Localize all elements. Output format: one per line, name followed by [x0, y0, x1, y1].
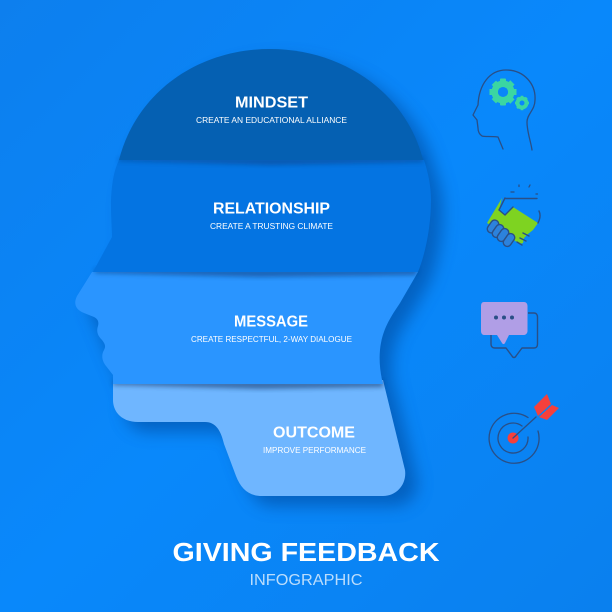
- panel: relationship: [93, 160, 431, 272]
- panel: outcome: [113, 380, 405, 496]
- title: GIVING FEEDBACK: [172, 537, 440, 567]
- shadow under relationship: [95, 269, 418, 277]
- text: create an educational alliance: CREATE AN EDUCATIONAL ALLIANCE: [196, 116, 347, 125]
- shadow under message: [113, 381, 383, 389]
- text: create respectful: CREATE RESPECTFUL, 2-WAY DIALOGUE: [191, 335, 352, 344]
- icon: head with gears: [473, 70, 535, 150]
- heading: outcome: OUTCOME: [273, 424, 355, 442]
- panel: message: [75, 272, 418, 384]
- subtitle: INFOGRAPHIC: [250, 572, 362, 589]
- panel: mindset: [119, 49, 423, 160]
- heading: message: MESSAGE: [234, 314, 308, 330]
- heading: mindset: MINDSET: [235, 94, 309, 112]
- text: create a trusting climate: CREATE A TRUSTING CLIMATE: [210, 222, 333, 231]
- heading: relationship: RELATIONSHIP: [213, 200, 330, 218]
- icon: speech bubbles: [481, 302, 538, 358]
- shadow under mindset: [119, 158, 423, 165]
- icon: target with arrow: [489, 394, 559, 463]
- text: improve performance: IMPROVE PERFORMANCE: [263, 446, 366, 455]
- icon: handshake: [486, 185, 540, 248]
- head drop shadow: [88, 59, 443, 506]
